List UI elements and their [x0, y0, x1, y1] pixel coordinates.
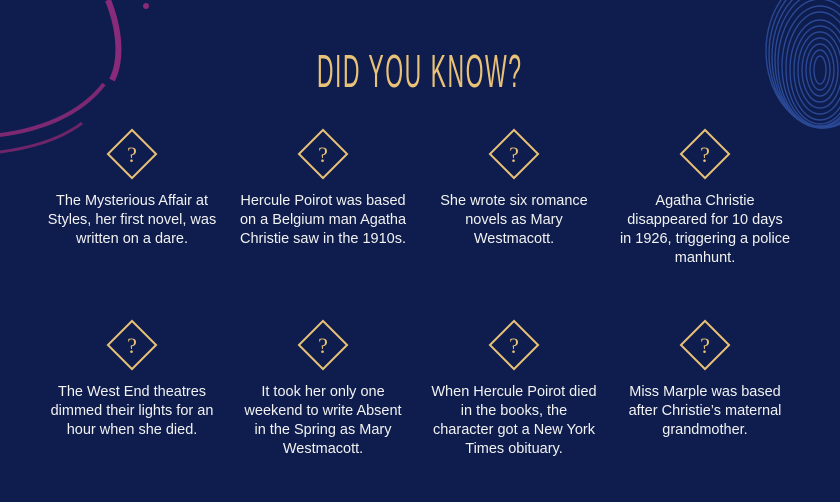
fact 4: disappeared for 10 days — [627, 212, 783, 228]
fact 5 — [51, 384, 213, 438]
fact 6: in the Spring as Mary — [254, 422, 392, 438]
fact 7: in the books, the — [461, 403, 567, 419]
icon: diamond 7: ? — [509, 333, 519, 358]
fact 8 — [629, 384, 781, 438]
icon: diamond 8 — [680, 320, 730, 370]
decoration: fingerprint — [765, 0, 840, 129]
fact 6: Westmacott. — [283, 441, 363, 457]
fact 2: Hercule Poirot was based — [240, 193, 406, 209]
fact 2 — [240, 193, 406, 247]
fact 5: dimmed their lights for an — [51, 403, 213, 419]
fact 5: hour when she died. — [67, 422, 197, 438]
fact 4: in 1926, triggering a police — [620, 231, 790, 247]
icon: diamond 6: ? — [318, 333, 328, 358]
fact 3: novels as Mary — [465, 212, 563, 228]
fact 7: character got a New York — [433, 422, 595, 438]
icon: diamond 3 — [488, 128, 540, 180]
fact 7: Times obituary. — [465, 441, 563, 457]
fact 4: Agatha Christie — [655, 193, 755, 209]
fact 6 — [244, 384, 402, 457]
fact 8: grandmother. — [662, 422, 748, 438]
fact 8: after Christie’s maternal — [629, 403, 781, 419]
icon: diamond 1: ? — [127, 142, 137, 167]
fact 6: It took her only one — [261, 384, 385, 400]
icon: diamond 3: ? — [509, 142, 519, 167]
fact 3: Westmacott. — [474, 231, 554, 247]
fact 4: manhunt. — [675, 250, 735, 266]
fact 5: The West End theatres — [58, 384, 206, 400]
fact 1 — [48, 193, 216, 247]
fact 2: Christie saw in the 1910s. — [240, 231, 406, 247]
title: DID YOU KNOW? — [317, 45, 523, 97]
icon: diamond 4 — [680, 128, 730, 180]
icon: diamond 2 — [298, 128, 348, 180]
icon: diamond 8: ? — [700, 333, 710, 358]
decoration: stain ring — [0, 0, 149, 154]
fact 3: She wrote six romance — [440, 193, 588, 209]
fact 3 — [440, 193, 588, 247]
icon: diamond 6 — [298, 320, 348, 370]
icon: diamond 4: ? — [700, 142, 710, 167]
icon: diamond 2: ? — [318, 142, 328, 167]
icon: diamond 1 — [106, 128, 158, 180]
fact 2: on a Belgium man Agatha — [240, 212, 406, 228]
fact 8: Miss Marple was based — [629, 384, 781, 400]
icon: diamond 5: ? — [127, 333, 137, 358]
icon: diamond 5 — [106, 320, 158, 370]
fact 4 — [620, 193, 790, 266]
fact 1: Styles, her first novel, was — [48, 212, 216, 228]
fact 7: When Hercule Poirot died — [431, 384, 597, 400]
fact 1: The Mysterious Affair at — [56, 193, 208, 209]
fact 7 — [431, 384, 597, 457]
icon: diamond 7 — [488, 320, 540, 370]
fact 1: written on a dare. — [76, 231, 188, 247]
fact 6: weekend to write Absent — [244, 403, 402, 419]
